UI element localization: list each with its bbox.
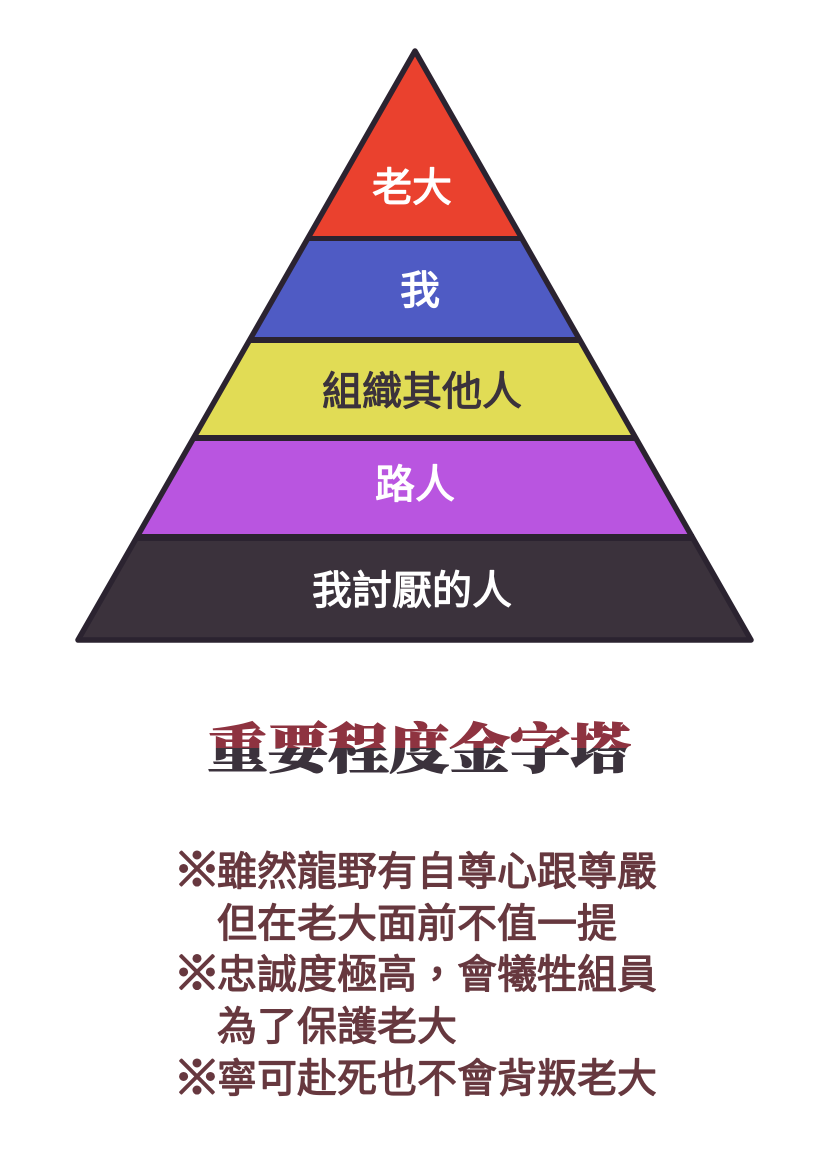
description text (174, 844, 657, 1104)
line 2: 但在老大面前不值一提 (217, 902, 617, 946)
tier: 路人 (137, 438, 694, 538)
tier: 我 (250, 238, 580, 340)
line 1: 雖然龍野有自尊心跟尊嚴 (217, 850, 657, 894)
tier: 路人: 路人 (375, 463, 455, 507)
tier: 老大 (308, 51, 522, 238)
pyramid chart (78, 51, 751, 640)
line 3: ※ (174, 947, 220, 1000)
tier: 組織其他人: 組織其他人 (322, 370, 522, 414)
line 5: 寧可赴死也不會背叛老大 (217, 1057, 657, 1101)
tier: 我討厭的人: 我討厭的人 (312, 569, 512, 613)
line 4: 為了保護老大 (217, 1005, 457, 1049)
line 1: ※ (174, 844, 220, 896)
tier: 組織其他人 (194, 340, 636, 438)
tier: 我討厭的人 (78, 538, 751, 640)
line 3: 忠誠度極高，會犧牲組員 (217, 953, 657, 997)
line 5: ※ (174, 1052, 220, 1104)
pyramid outline and dividers (78, 51, 751, 640)
title: 重要程度金字塔 (207, 720, 631, 780)
tier: 我: 我 (400, 269, 440, 313)
tier: 老大: 老大 (372, 166, 452, 210)
